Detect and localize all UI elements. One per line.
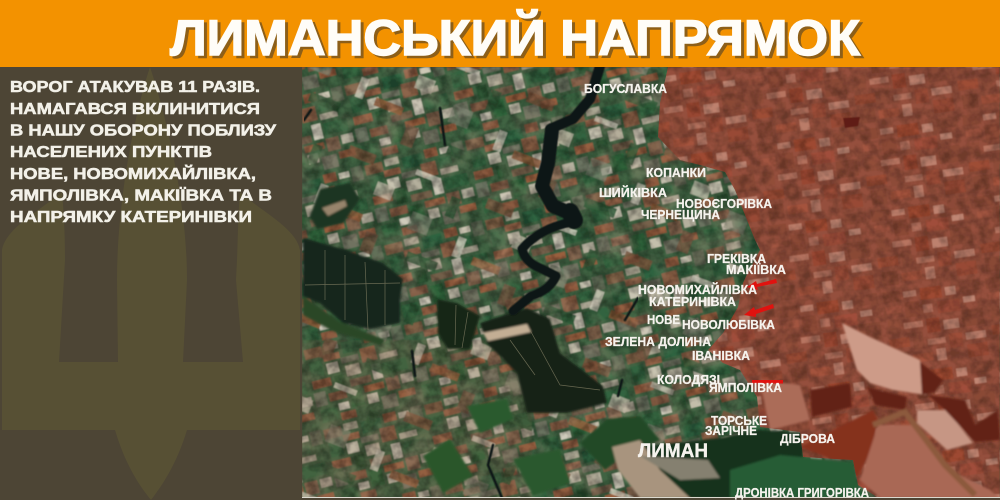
label: Makiivka: МАКІЇВКА bbox=[726, 262, 786, 277]
map: red zone sand flats and forests bbox=[760, 323, 1000, 498]
text block: attack summary: ВОРОГ АТАКУВАВ 11 РАЗІВ. bbox=[10, 79, 260, 96]
icon: trident watermark bbox=[2, 67, 300, 500]
label: Dronivka and Hryhorivka: ДРОНІВКА ГРИГОРІВКА bbox=[735, 486, 869, 500]
label: Lyman: ЛИМАН bbox=[638, 441, 708, 462]
panel: left text panel with trident watermark bbox=[0, 67, 302, 500]
arrow: attack marker at Yampolivka bbox=[752, 380, 783, 384]
label: Kolodiazi: КОЛОДЯЗІ bbox=[657, 373, 720, 387]
label: Torske: ТОРСЬКЕ bbox=[711, 414, 767, 428]
label: Bohuslavka: БОГУСЛАВКА bbox=[584, 82, 667, 96]
arrow: attack toward Makiivka bbox=[747, 279, 777, 290]
map: farmland base bbox=[302, 67, 1000, 498]
map: occupied territory red overlay bbox=[630, 67, 1000, 498]
text block: attack summary: НАМАГАВСЯ ВКЛИНИТИСЯ bbox=[10, 101, 260, 118]
map: bottom edge strip bbox=[302, 497, 1000, 498]
map: forests bbox=[303, 183, 870, 498]
label: Shyikivka: ШИЙКІВКА bbox=[599, 185, 667, 200]
label: Hrekivka: ГРЕКІВКА bbox=[707, 252, 766, 266]
label: Kopanky: КОПАНКИ bbox=[646, 166, 706, 180]
label: Novoliubivka: НОВОЛЮБІВКА bbox=[682, 318, 775, 332]
title: ЛИМАНСЬКИЙ НАПРЯМОК bbox=[173, 12, 863, 68]
text block: attack summary: НАПРЯМКУ КАТЕРИНІВКИ bbox=[10, 209, 252, 226]
label: Dibrova: ДІБРОВА bbox=[780, 432, 835, 446]
label: Novomykhailivka: НОВОМИХАЙЛІВКА bbox=[638, 282, 757, 297]
label: Novoiehorivka: НОВОЄГОРІВКА bbox=[676, 197, 772, 211]
label: Yampolivka: ЯМПОЛІВКА bbox=[709, 381, 782, 395]
text block: attack summary: В НАШУ ОБОРОНУ ПОБЛИЗУ bbox=[10, 122, 277, 140]
title: ЛИМАНСЬКИЙ НАПРЯМОК bbox=[170, 9, 860, 66]
label: Nove: НОВЕ bbox=[647, 313, 680, 327]
text block: attack summary: НАСЕЛЕНИХ ПУНКТІВ bbox=[10, 144, 212, 161]
satellite map bbox=[302, 66, 1000, 500]
label: Ivanivka: ІВАНІВКА bbox=[692, 349, 750, 363]
text block: attack summary: ЯМПОЛІВКА, МАКІЇВКА ТА В bbox=[10, 186, 272, 204]
text block: attack summary: НОВЕ, НОВОМИХАЙЛІВКА, bbox=[10, 164, 256, 183]
top orange title band bbox=[0, 0, 1000, 67]
map: river and reservoir bbox=[304, 66, 638, 498]
label: Katerynivka: КАТЕРИНІВКА bbox=[649, 295, 736, 309]
label: Zelena Dolyna: ЗЕЛЕНА ДОЛИНА bbox=[605, 335, 711, 349]
text block: attack summary bbox=[10, 79, 277, 226]
label: Chernenshchyna: ЧЕРНЕЩИНА bbox=[641, 208, 720, 222]
map: forest firebreaks bbox=[305, 250, 600, 390]
label: Zarichne: ЗАРІЧНЕ bbox=[705, 424, 757, 438]
arrow: attack toward Novoliubivka bbox=[744, 304, 774, 317]
